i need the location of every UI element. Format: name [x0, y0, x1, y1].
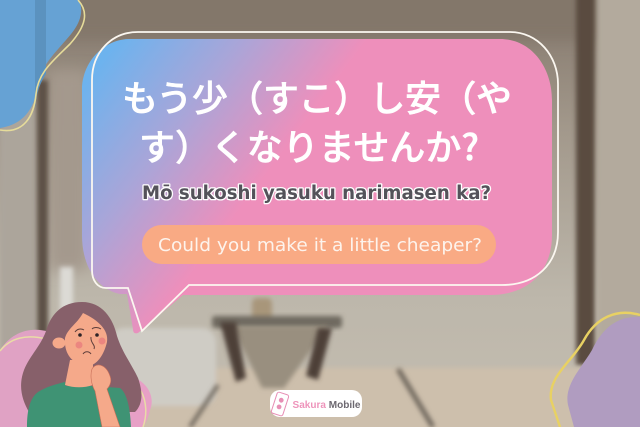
eyes	[78, 333, 99, 337]
yellow outline of blue blob	[0, 0, 85, 131]
brows and mouth	[75, 328, 101, 354]
face	[65, 313, 107, 366]
hand and arm	[91, 365, 120, 427]
translation pill: Could you make it a little cheaper?	[158, 235, 482, 256]
japanese heading: もう少（すこ）し安（や	[122, 70, 512, 122]
romaji subheading: Mō sukoshi yasuku narimasen ka?	[142, 183, 491, 204]
ear	[52, 338, 66, 348]
yellow outline of purple blob	[551, 313, 640, 427]
shirt	[27, 382, 131, 427]
logo: sakura mobile	[270, 390, 362, 417]
hair	[21, 302, 141, 412]
translation pill	[142, 225, 496, 264]
logo: sakura mobile: Sakura Mobile	[292, 399, 361, 411]
icon: phone	[271, 392, 289, 416]
bubble fill	[82, 39, 552, 333]
speech bubble	[82, 32, 558, 333]
blue blob top left	[0, 0, 81, 128]
purple blob bottom right	[567, 317, 640, 427]
character: thinking woman	[21, 302, 141, 427]
bubble outline	[92, 32, 558, 331]
cheeks	[76, 338, 106, 348]
japanese heading	[122, 70, 512, 171]
japanese heading: す）くなりませんか?	[139, 119, 479, 171]
pink blob behind character	[0, 330, 152, 427]
neck	[65, 360, 93, 387]
